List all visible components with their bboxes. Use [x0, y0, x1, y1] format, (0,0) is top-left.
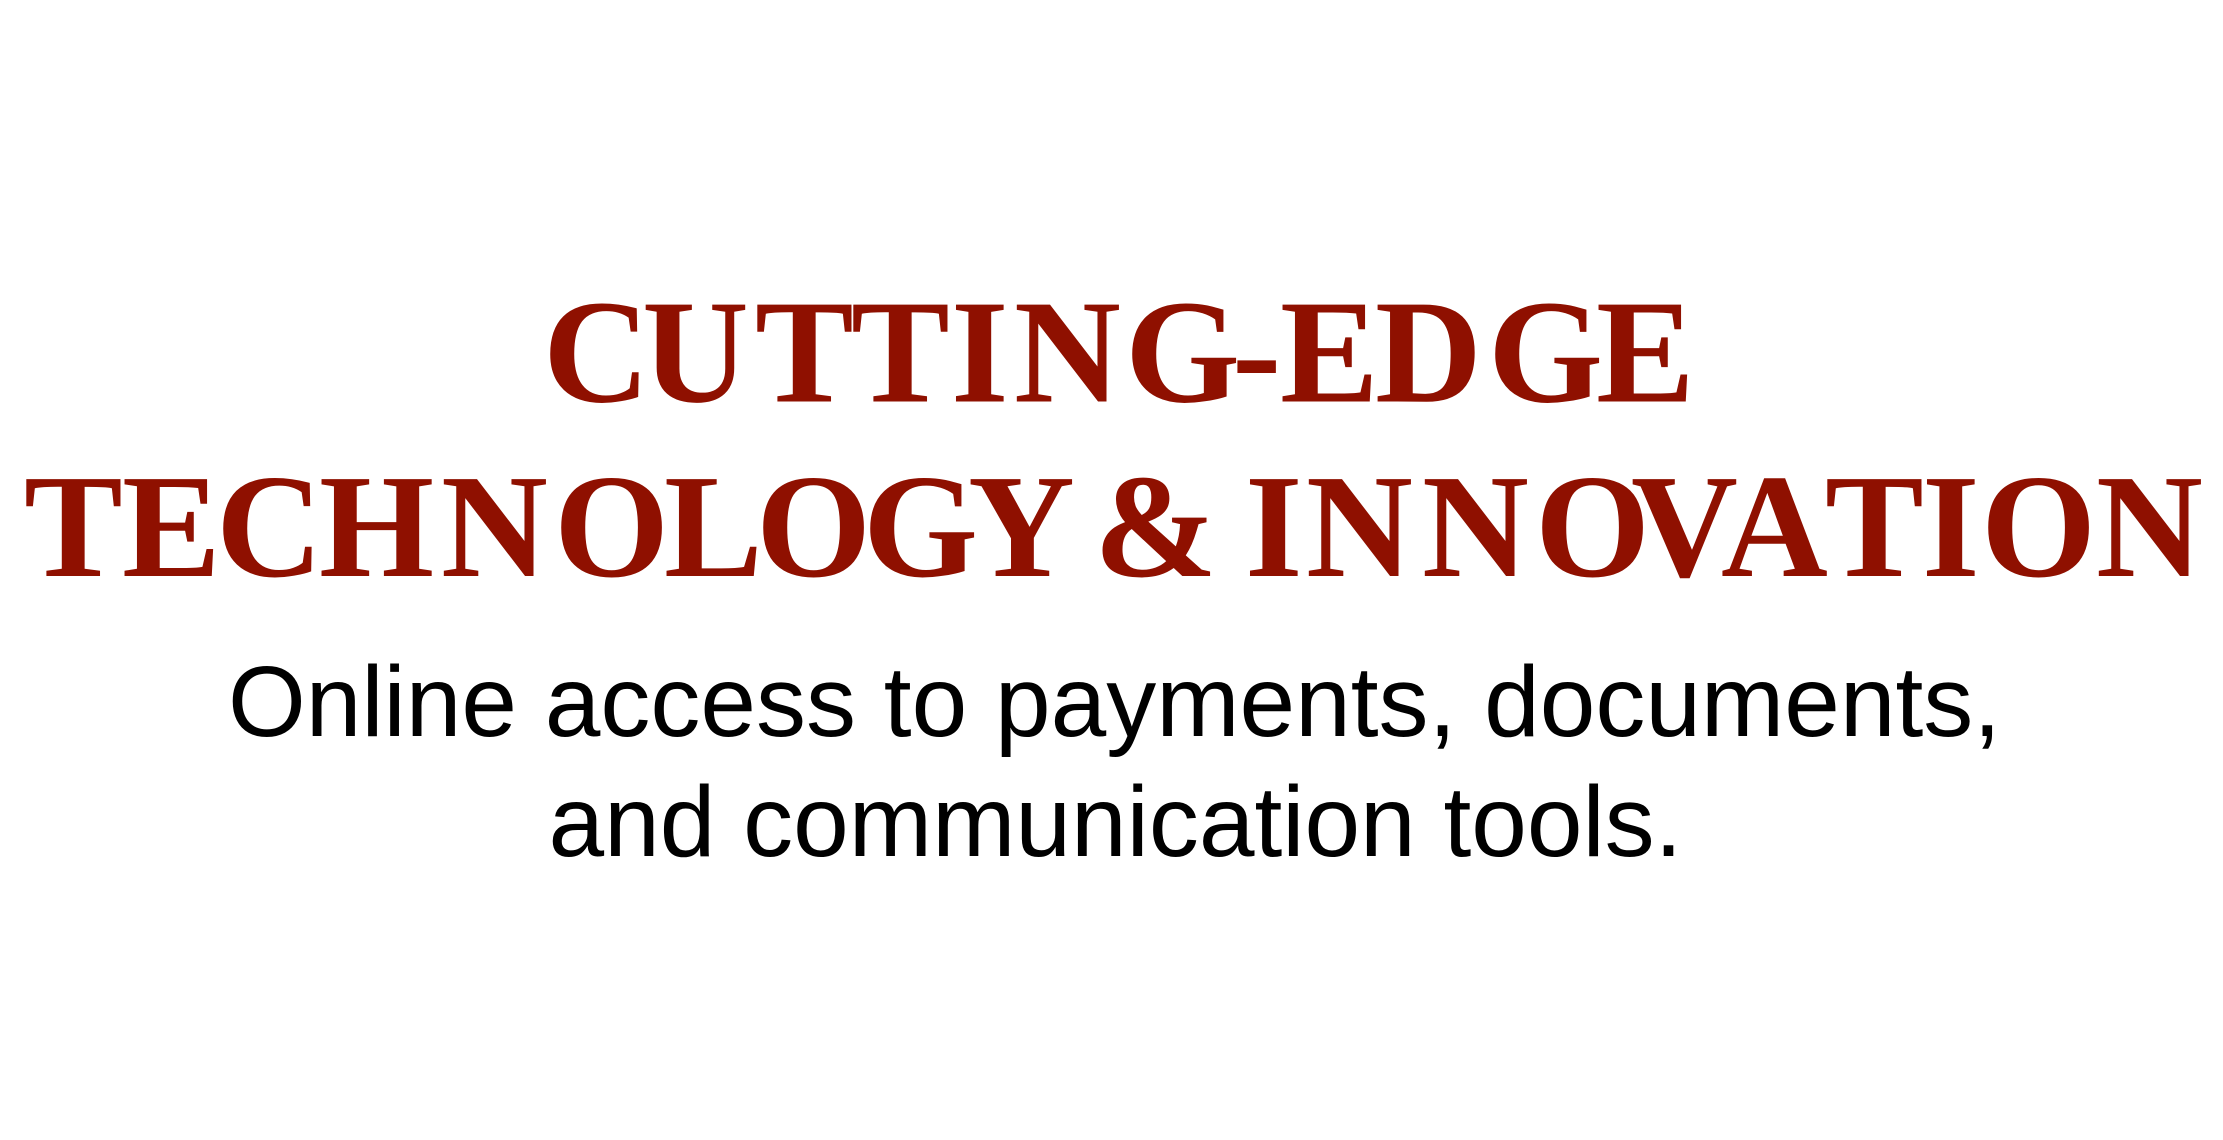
title: [24, 270, 2203, 609]
subtitle text: [228, 646, 2001, 878]
subtitle text: and communication tools.: [549, 766, 1682, 878]
title: TECHNOLOGY & INNOVATION: [24, 445, 2203, 609]
subtitle text: Online access to payments, documents,: [228, 646, 2001, 758]
title: CUTTING-EDGE: [543, 270, 1695, 434]
